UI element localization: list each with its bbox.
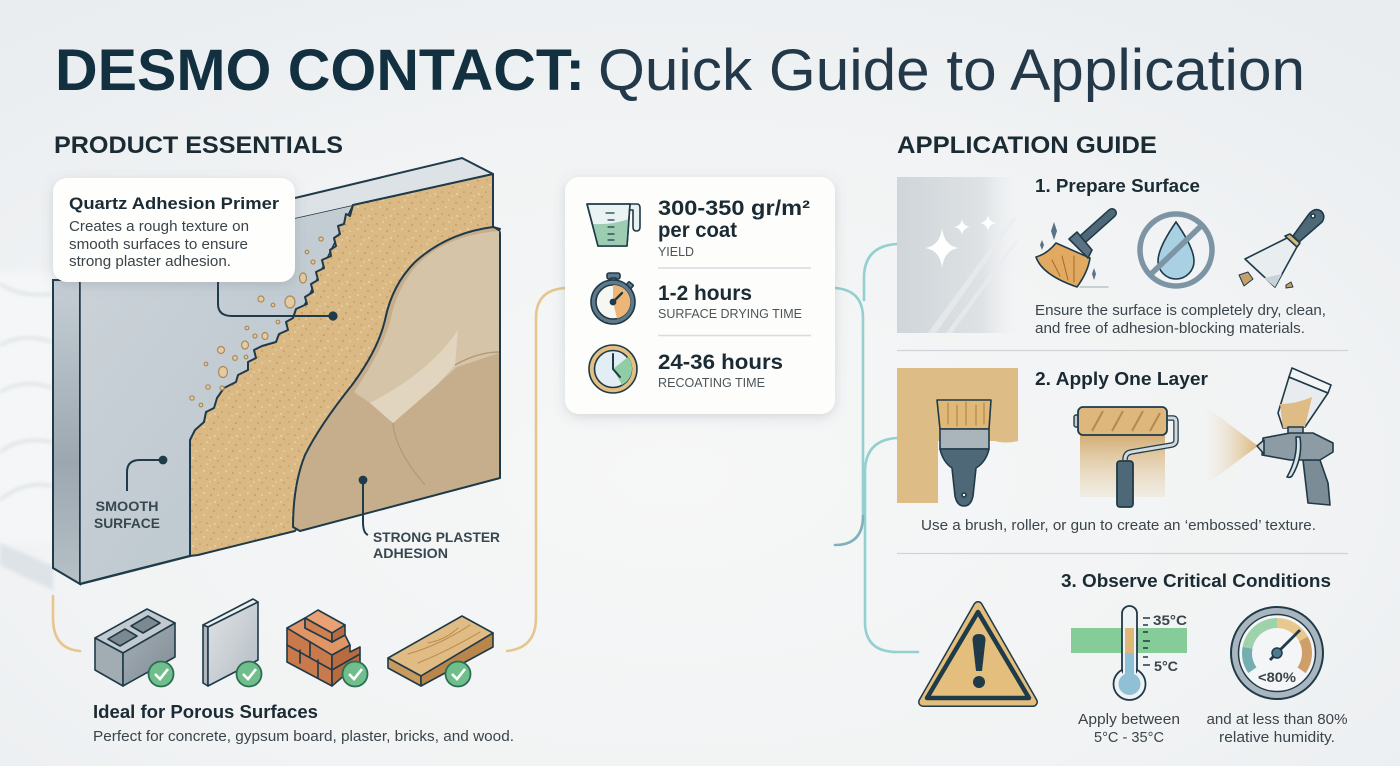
- heading: application guide: APPLICATION GUIDE: [897, 132, 1157, 159]
- callout: quartz adhesion primer: strong plaster adhesion.: [69, 254, 231, 270]
- icon: humidity gauge: [1231, 607, 1323, 699]
- icon: thermometer: 35°C: [1153, 612, 1187, 628]
- label: smooth surface: SURFACE: [94, 515, 160, 531]
- label: strong plaster adhesion: STRONG PLASTER: [373, 529, 500, 545]
- icon: check marks: [148, 662, 470, 686]
- wall cross-section illustration: [53, 158, 500, 584]
- step text: humidity: relative humidity.: [1219, 730, 1335, 746]
- label: strong plaster adhesion: [359, 476, 500, 561]
- marble texture backdrop: [0, 272, 54, 590]
- spec: yield: per coat: [658, 219, 737, 242]
- title: [55, 38, 1305, 103]
- icon: paint brush: [937, 400, 991, 506]
- spec: drying time: 1-2 hours: [658, 282, 752, 305]
- icon: thermometer: 5°C: [1154, 658, 1178, 674]
- icon: thermometer: [1071, 606, 1187, 700]
- label: smooth surface: SMOOTH: [96, 498, 158, 514]
- step 1: prepare surface: [897, 176, 1326, 337]
- icon: gypsum board: [203, 599, 258, 686]
- icon: scraper: [1239, 210, 1324, 288]
- step text: Use a brush, roller, or gun to create an ‘embossed’ texture.: [921, 518, 1316, 534]
- connector: gold lines: [53, 288, 565, 651]
- spec: drying time: [658, 282, 802, 321]
- callout: quartz adhesion primer: Creates a rough texture on: [69, 219, 249, 235]
- step text: temperature: 5°C - 35°C: [1094, 730, 1164, 746]
- image: clean surface: [897, 177, 1019, 333]
- step text: humidity: and at less than 80%: [1206, 712, 1348, 728]
- step text: Ensure the surface is completely dry, clean,: [1035, 303, 1326, 319]
- image: applied texture: [897, 368, 1018, 503]
- spec: yield: [658, 197, 810, 259]
- icon: wood plank: [388, 616, 493, 686]
- icon: roller: [1074, 407, 1176, 507]
- icon: stopwatch: [591, 273, 635, 324]
- callout: quartz adhesion primer: smooth surfaces to ensure: [69, 237, 248, 253]
- wall: rough primer layer: [190, 174, 500, 556]
- spec: drying time: SURFACE DRYING TIME: [658, 307, 802, 321]
- step heading: 3. Observe Critical Conditions: [1061, 571, 1331, 591]
- step text: and free of adhesion-blocking materials.: [1035, 321, 1305, 337]
- spec: yield: 300-350 gr/m²: [658, 197, 810, 220]
- icon: concrete block: [95, 609, 175, 686]
- heading: product essentials: PRODUCT ESSENTIALS: [54, 132, 343, 159]
- connector: teal lines: [835, 244, 918, 652]
- step text: humidity: [1206, 712, 1348, 746]
- wall: smooth plaster layer: [293, 227, 500, 531]
- label: smooth surface: [94, 456, 167, 531]
- spec: yield: YIELD: [658, 245, 694, 259]
- icon: spray gun: [1204, 368, 1333, 505]
- step text: temperature: Apply between: [1078, 712, 1180, 728]
- step text: temperature: [1078, 712, 1180, 746]
- step 3: observe critical conditions: [923, 571, 1348, 746]
- icon: bricks: [287, 610, 360, 686]
- step heading: 2. Apply One Layer: [1035, 369, 1208, 389]
- panel: key specifications: [565, 177, 835, 414]
- label: strong plaster adhesion: ADHESION: [373, 545, 448, 561]
- icon: humidity gauge: <80%: [1258, 669, 1297, 685]
- icon: warning triangle: [923, 606, 1033, 702]
- step text: [1035, 303, 1326, 337]
- text: ideal for porous surfaces: Ideal for Porous Surfaces: [93, 701, 318, 722]
- spec: recoating time: 24-36 hours: [658, 351, 783, 374]
- icon: clock: [589, 345, 637, 393]
- callout leader: primer: [218, 282, 338, 321]
- callout: quartz adhesion primer: [53, 178, 295, 282]
- text: ideal for porous surfaces: Perfect for concrete, gypsum board, plaster, bricks, and wood.: [93, 728, 514, 745]
- step heading: 1. Prepare Surface: [1035, 176, 1200, 196]
- text: ideal for porous surfaces: [93, 701, 514, 745]
- icon: no water: [1140, 214, 1212, 286]
- icon: dust brush: [1036, 213, 1112, 287]
- step 2: apply one layer: [897, 368, 1333, 534]
- spec: recoating time: RECOATING TIME: [658, 376, 765, 390]
- wall: debris particles: [190, 237, 323, 407]
- callout: quartz adhesion primer: Quartz Adhesion Primer: [69, 194, 279, 213]
- wall: smooth substrate: [53, 158, 493, 584]
- icon: measuring cup: [587, 204, 640, 246]
- panel: porous surfaces: [93, 599, 514, 745]
- title: Quick Guide to Application: [598, 38, 1305, 103]
- spec: recoating time: [658, 351, 783, 390]
- title: DESMO CONTACT:: [55, 38, 585, 103]
